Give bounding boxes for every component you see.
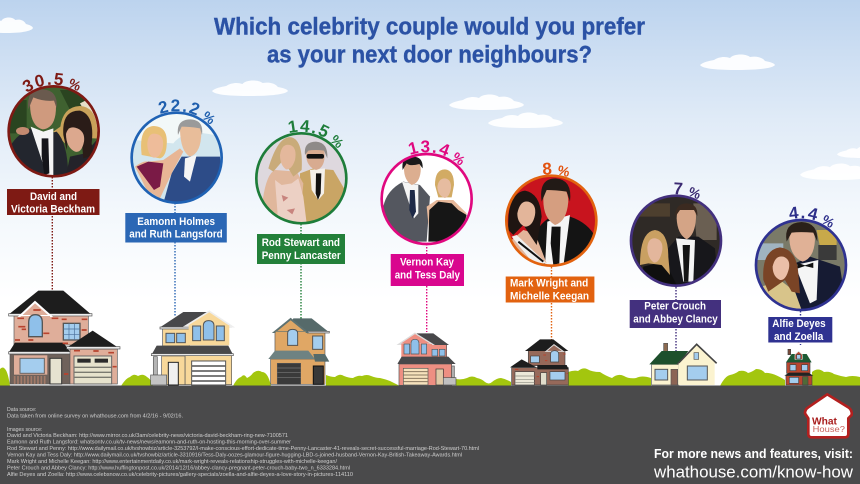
data and image sources: Data taken from online survey on whathouse.com from 4/2/16 - 9/02/16. <box>7 414 183 420</box>
call to action: whathouse.com/know-how <box>653 462 854 482</box>
house 6: cream cottage with green roof <box>649 343 717 385</box>
house 5: brown brick <box>510 339 569 385</box>
couple: Rod Stewart and Penny Lancaster <box>255 120 348 264</box>
name label: and Zoella <box>774 331 824 343</box>
photo ring <box>631 196 721 286</box>
house 3: tan with slate roof <box>268 318 329 384</box>
photo ring <box>506 176 596 266</box>
dotted connector lines <box>52 177 801 352</box>
bushes <box>0 368 860 386</box>
data and image sources: Mark Wright and Michelle Keegan: http://www.entertainmentdaily.co.uk/mark-wright-reveals-relationship-struggles-with-michelle-keegan/ <box>7 459 338 465</box>
photo: David and Victoria Beckham <box>7 83 103 180</box>
data and image sources: Rod Stewart and Penny: http://www.dailymail.co.uk/tvshowbiz/article-3253792/I-make-conscious-effort-dedicate-time-Penny-Lancaster-41-reveals-secret-successful-marriage-Rod-Stewart-70.html <box>7 446 479 452</box>
data and image sources: Eamonn and Ruth Langsford: whatsontv.co.uk/tv-news/news/eamonn-and-ruth-on-hosting-this-morning-over-summer <box>7 440 291 446</box>
percentage 13.4%: 13.4% <box>408 140 464 166</box>
photo: Rod Stewart and Penny Lancaster <box>255 132 350 227</box>
couple: Eamonn Holmes and Ruth Langsford <box>125 99 227 242</box>
name label <box>257 234 345 264</box>
title: Which celebrity couple would you prefer <box>214 14 645 40</box>
data and image sources: Peter Crouch and Abbey Clancy: http://www.huffingtonpost.co.uk/2014/12/16/abbey-clancy-pregnant-peter-crouch-baby-two_n_6333284.html <box>7 466 350 472</box>
photo: Vernon Kay and Tess Daly <box>380 153 475 248</box>
photo ring <box>256 133 346 223</box>
data and image sources: Data source: <box>7 407 36 413</box>
call to action: For more news and features, visit: <box>654 447 853 461</box>
name label: and Abbey Clancy <box>633 314 718 326</box>
name label: Eamonn Holmes <box>137 216 215 228</box>
percentage 7%: 7% <box>674 182 700 199</box>
name label <box>630 300 721 328</box>
couple: Alfie Deyes and Zoella <box>754 206 848 343</box>
data and image sources: Alfie Deyes and Zoella: http://www.celebsnow.co.uk/celebrity-pictures/gallery-specials/zoella-and-alfie-deyes-a-love-story-in-pictures-114110 <box>7 472 353 478</box>
couple: David and Victoria Beckham <box>7 72 100 216</box>
percentage 30.5%: 30.5% <box>22 72 80 92</box>
photo: Eamonn Holmes and Ruth Langsford <box>130 110 225 205</box>
data and image sources: Images source: <box>7 427 42 433</box>
name label: Peter Crouch <box>644 300 706 312</box>
data and image sources <box>7 407 479 478</box>
name label: Alfie Deyes <box>772 318 826 330</box>
name label: Victoria Beckham <box>11 204 95 216</box>
percentage 8%: 8% <box>543 162 569 177</box>
ground <box>0 386 860 484</box>
couple: Mark Wright and Michelle Keegan <box>505 162 598 302</box>
sky background <box>0 0 860 300</box>
name label <box>125 213 227 242</box>
logo: WhatHouse?: House? <box>813 424 845 434</box>
couple: Peter Crouch and Abbey Clancy <box>630 182 722 328</box>
percentage 22.2%: 22.2% <box>158 99 214 124</box>
name label: Penny Lancaster <box>262 250 341 262</box>
name label: Vernon Kay <box>400 257 455 269</box>
call to action <box>653 447 854 482</box>
photo: Peter Crouch and Abbey Clancy <box>630 195 723 288</box>
name label: Michelle Keegan <box>510 290 589 302</box>
clouds <box>0 17 860 180</box>
data and image sources: David and Victoria Beckham: http://www.mirror.co.uk/3am/celebrity-news/victoria-david-beckham-ring-new-7100571 <box>7 433 288 439</box>
name label <box>7 189 100 216</box>
name label: and Tess Daly <box>395 270 461 282</box>
percentage 4.4%: 4.4% <box>789 206 834 228</box>
name label <box>391 254 464 286</box>
photo: Alfie Deyes and Zoella <box>755 219 848 313</box>
data and image sources: Vernon Kay and Tess Daly: http://www.dailymail.co.uk/tvshowbiz/article-3310916/Tess-Daly-oozes-glamour-figure-hugging-LBD-s-joined-husband-Vernon-Kay-British-Takeaway-Awards.html <box>7 453 462 459</box>
couple: Vernon Kay and Tess Daly <box>380 140 473 286</box>
name label: and Ruth Langsford <box>129 229 223 241</box>
name label: Rod Stewart and <box>262 237 340 249</box>
photo ring <box>9 86 99 176</box>
photo ring <box>756 220 846 310</box>
photo ring <box>132 113 222 203</box>
title: as your next door neighbours? <box>267 42 592 68</box>
photo ring <box>382 154 472 244</box>
name label: David and <box>30 191 77 203</box>
name label <box>768 317 832 343</box>
logo: WhatHouse? <box>805 394 852 437</box>
house 4: pink with grey roof <box>398 333 456 385</box>
percentage 14.5%: 14.5% <box>288 120 343 148</box>
photo: Mark Wright and Michelle Keegan <box>505 175 598 268</box>
house 1: brick two-storey <box>9 291 120 384</box>
house 7: small red brick <box>784 349 813 385</box>
logo: WhatHouse?: What <box>812 416 838 427</box>
name label <box>506 276 594 302</box>
name label: Mark Wright and <box>510 278 588 290</box>
house 2: cream with grey roof <box>151 311 233 385</box>
title <box>214 14 645 68</box>
